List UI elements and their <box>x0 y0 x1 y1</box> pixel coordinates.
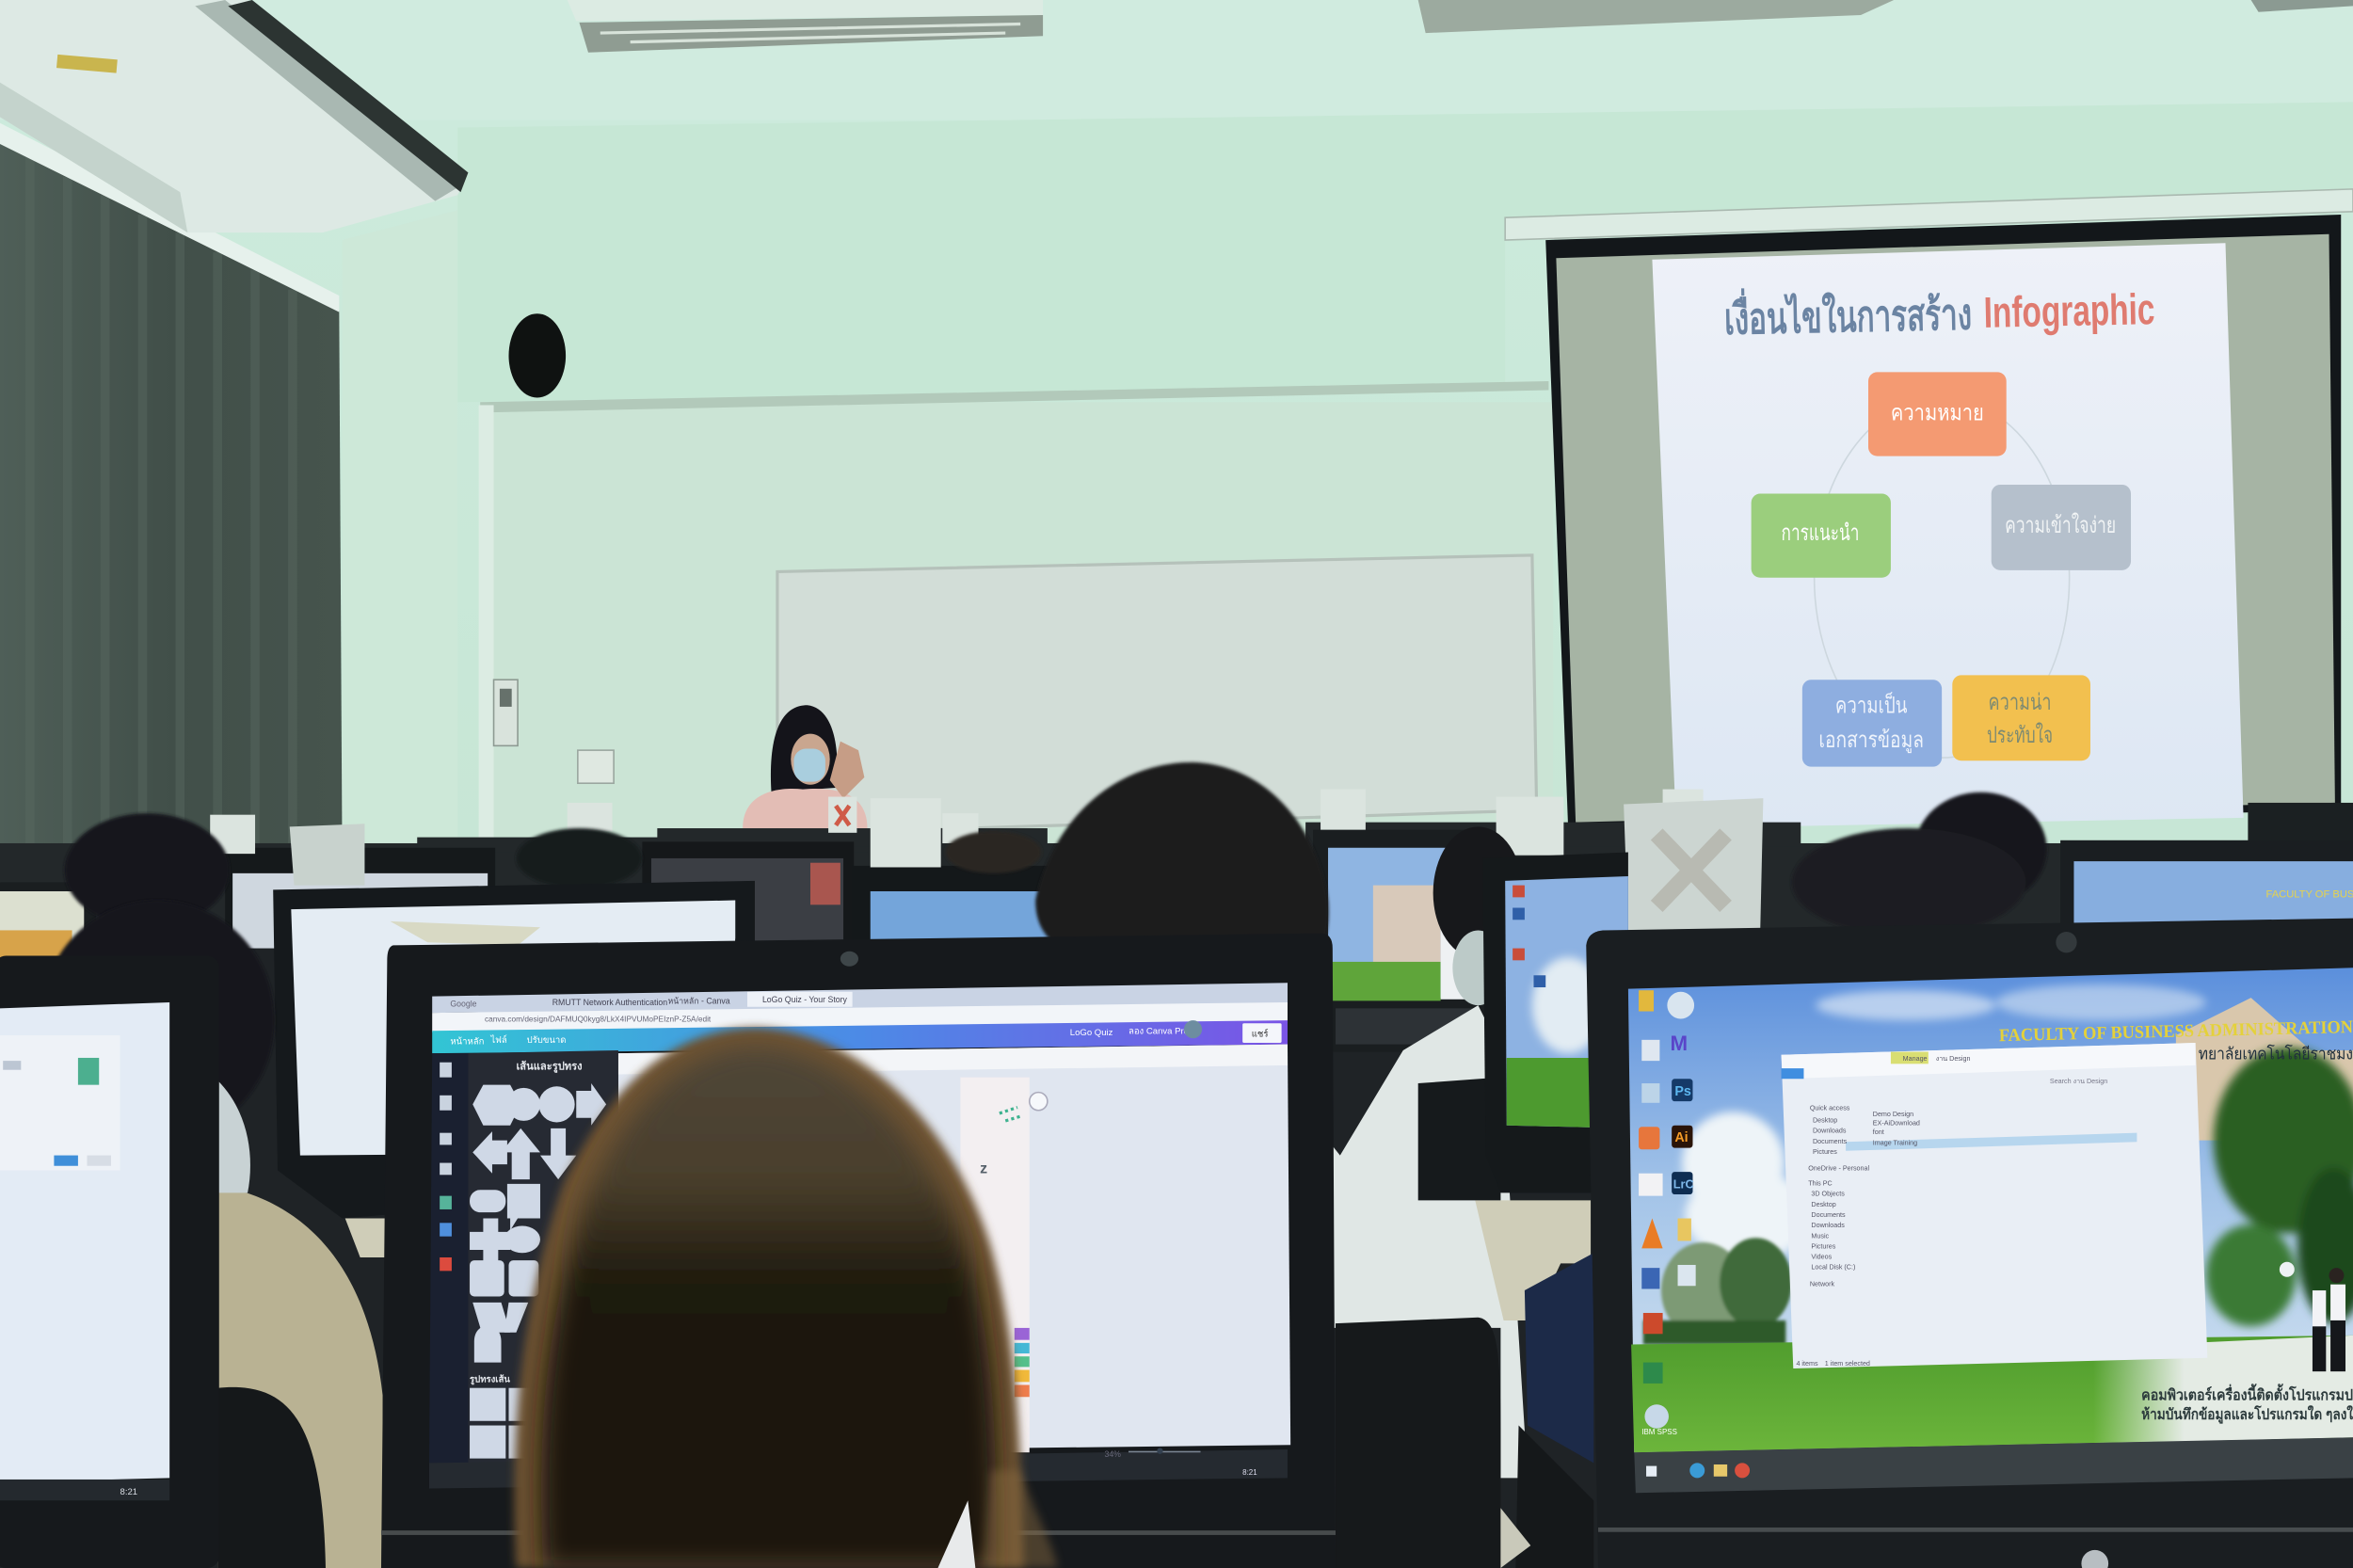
address bar <box>432 1002 1288 1032</box>
back row desks and monitors <box>0 790 2353 1568</box>
student in white shirt <box>345 826 1591 1478</box>
back row heads <box>65 792 2047 936</box>
desk behind student <box>1475 1200 1591 1320</box>
file explorer window: EX-AiDownload <box>1873 1120 1920 1128</box>
windows taskbar <box>1634 1437 2353 1493</box>
monitor: front centre: ปรับขนาด <box>527 1035 567 1046</box>
big curly-haired head <box>1035 762 1329 975</box>
box: documentation: เอกสารข้อมูล <box>1818 728 1924 754</box>
file explorer window: 3D Objects <box>1811 1191 1845 1198</box>
monitor: front centre: canva.com/design/DAFMUQ0kyg8/LkX4IPVUMoPEIznP-Z5A/edit <box>485 1015 712 1024</box>
box: easy to understand <box>1992 485 2131 570</box>
box: impressive: ประทับใจ <box>1987 722 2053 748</box>
monitor: front centre: แชร์ <box>1252 1029 1268 1040</box>
middle monitor: left <box>273 881 755 1219</box>
file explorer window: Documents <box>1811 1211 1846 1219</box>
desktop icons: Ai <box>1674 1130 1689 1145</box>
foreground head with brown hair <box>515 1028 1058 1568</box>
chairs and body, foreground <box>217 1253 1593 1568</box>
box: documentation <box>1802 680 1942 767</box>
file explorer window: Pictures <box>1813 1148 1837 1156</box>
monitor: front centre: 34% <box>1104 1449 1121 1459</box>
file explorer window: Downloads <box>1811 1222 1845 1229</box>
box: documentation: ความเป็น <box>1835 691 1907 718</box>
file explorer window: Search งาน Design <box>2050 1078 2107 1085</box>
large trees <box>2206 1048 2353 1326</box>
windows taskbar <box>429 1449 1288 1489</box>
file explorer window: Quick access <box>1810 1105 1850 1112</box>
monitor: front centre: LoGo Quiz <box>1070 1028 1113 1038</box>
browser tabs: LoGo Quiz - Your Story <box>762 995 848 1004</box>
monitor: front centre: ลอง Canva Pro <box>1128 1026 1189 1036</box>
canva shape panel: เส้นและรูปทรง <box>516 1061 583 1074</box>
box: easy to understand: ความเข้าใจง่าย <box>2005 512 2116 538</box>
side rail icons <box>440 1063 452 1271</box>
box: recommendation: การแนะนำ <box>1782 520 1859 546</box>
sign with crossed mark <box>1624 798 1763 930</box>
monitor: front left: 8:21 <box>120 1487 137 1497</box>
screen frame <box>1545 215 2341 828</box>
small red mark <box>836 806 849 825</box>
file explorer window: Manage <box>1903 1055 1928 1063</box>
lower room background <box>0 930 2353 1568</box>
canva toolbar <box>432 1020 1288 1053</box>
lower bezel <box>1598 1528 2353 1532</box>
file explorer window: Demo Design <box>1873 1111 1913 1118</box>
login dialog <box>0 1035 120 1171</box>
desktop icons <box>1639 990 1696 1436</box>
monitor: front centre: 8:21 <box>1242 1468 1257 1477</box>
desktop icons: LrC <box>1673 1177 1694 1192</box>
ceiling lights <box>568 0 2353 53</box>
air conditioner <box>0 0 468 232</box>
browser tabs: RMUTT Network Authentication <box>552 998 667 1007</box>
box: meaning: ความหมาย <box>1891 400 1984 425</box>
box: recommendation <box>1752 494 1891 578</box>
file explorer window: Local Disk (C:) <box>1811 1264 1855 1272</box>
file explorer window: Music <box>1811 1232 1830 1240</box>
slide <box>1652 243 2244 828</box>
file explorer window: Documents <box>1813 1138 1848 1145</box>
file explorer window: This PC <box>1808 1179 1833 1187</box>
file explorer window: งาน Design <box>1936 1055 1970 1063</box>
speaker <box>508 313 566 397</box>
back monitor: centre <box>853 866 1050 942</box>
student on the far left <box>40 901 383 1568</box>
whiteboard <box>777 555 1537 834</box>
monitor: front centre: หน้าหลัก <box>450 1037 485 1048</box>
file explorer window: Desktop <box>1811 1201 1836 1208</box>
back monitor: far left <box>0 882 96 972</box>
desktop icons: Ps <box>1674 1084 1691 1099</box>
pathway fade <box>2093 1336 2353 1444</box>
teacher <box>743 705 868 828</box>
file explorer window: Downloads <box>1813 1128 1847 1135</box>
curtains <box>0 123 343 853</box>
monitor: front right <box>1586 919 2353 1568</box>
hp logo <box>2081 1550 2108 1568</box>
box: meaning <box>1868 372 2007 456</box>
slide: Infographic <box>1983 284 2155 337</box>
file explorer window: OneDrive - Personal <box>1808 1165 1869 1173</box>
dark back row band <box>0 843 2353 949</box>
chair behind monitors <box>1418 1078 1500 1200</box>
monitor: front centre <box>381 934 1336 1568</box>
box: impressive: ความน่า <box>1989 690 2052 715</box>
lawn <box>1631 1336 2353 1452</box>
browser tabs <box>450 992 853 1009</box>
back monitor: far right <box>2060 840 2353 927</box>
browser tabs: Google <box>450 1000 477 1009</box>
screen housing <box>1505 189 2353 240</box>
back monitor: colour app <box>642 841 854 941</box>
file explorer window: 4 items <box>1796 1360 1818 1368</box>
desktop wallpaper <box>1628 968 2353 1452</box>
browser tab bar <box>432 983 1288 1013</box>
building <box>2176 998 2353 1141</box>
design page <box>960 1078 1048 1452</box>
desktop icons: M <box>1671 1032 1688 1055</box>
file explorer window: 1 item selected <box>1825 1360 1870 1368</box>
wall switches <box>494 680 614 783</box>
background trees <box>1643 1238 1792 1344</box>
monitor: front left <box>0 956 219 1568</box>
file explorer window: font <box>1873 1128 1884 1136</box>
canva shape panel <box>440 1050 618 1463</box>
projector screen <box>1505 189 2353 828</box>
desktop icons: IBM SPSS <box>1641 1428 1677 1436</box>
file explorer window: Videos <box>1811 1254 1833 1261</box>
back monitor: left centre <box>225 848 495 949</box>
file explorer window <box>1782 1043 2207 1368</box>
middle monitor: desktop <box>1482 853 1628 1192</box>
monitor lower bezel line <box>381 1530 1336 1535</box>
browser tabs: หน้าหลัก - Canva <box>668 997 730 1006</box>
file explorer window: Image Training <box>1873 1139 1917 1146</box>
students on wallpaper <box>2280 1262 2345 1371</box>
file explorer window: Pictures <box>1811 1242 1836 1250</box>
box: impressive <box>1952 675 2090 760</box>
paper signs <box>210 790 1704 886</box>
file explorer window: Network <box>1810 1280 1834 1288</box>
file explorer window: Desktop <box>1813 1117 1837 1125</box>
cycle ring <box>1815 397 2070 758</box>
monitor: front centre: ไฟล์ <box>489 1034 507 1046</box>
canva side rail <box>429 1053 468 1463</box>
canva shape panel: รูปทรงเส้น <box>470 1373 510 1385</box>
clouds <box>1682 984 2206 1260</box>
middle monitor: building wallpaper <box>1313 830 1490 1052</box>
canvas workspace <box>618 1045 1290 1452</box>
slide title: เงื่อนไขในการสร้าง <box>1723 283 1973 344</box>
design page: z <box>980 1161 987 1177</box>
